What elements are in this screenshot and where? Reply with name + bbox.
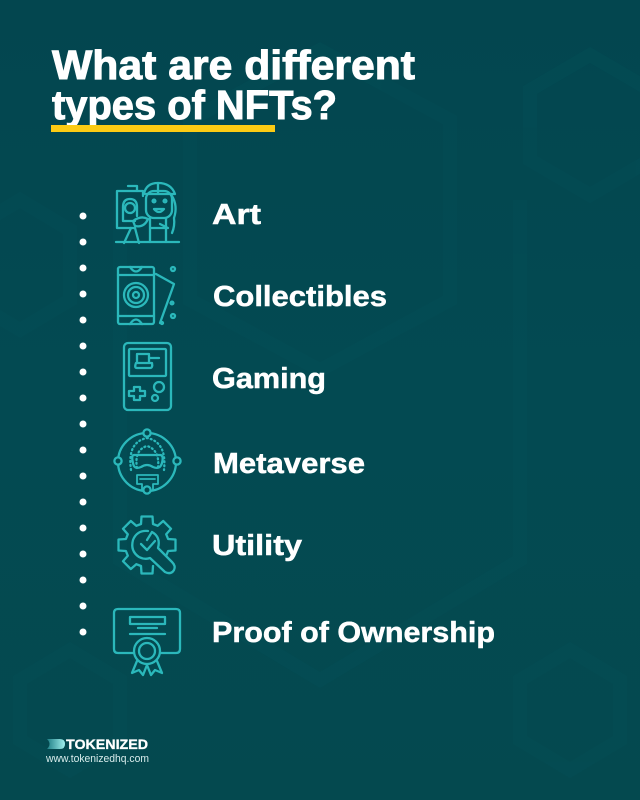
icon: certificate with rosette [114,609,180,675]
label: Utility: Utility [212,530,302,562]
icon: artist at easel [116,183,179,243]
title: What are different [52,42,415,88]
logo: TOKENIZED [66,737,148,752]
logo: www.tokenizedhq.com [45,753,149,765]
label: Collectibles: Collectibles [213,281,387,313]
icon: handheld game console [124,343,171,410]
label: Art: Art [212,199,261,231]
title: types of NFTs? [52,82,337,128]
icon: logo mark [47,739,65,749]
title underline [51,125,275,132]
label: Gaming: Gaming [212,363,326,395]
dotted timeline [80,212,86,636]
title [52,42,415,128]
icon: gear and wrench [118,516,176,574]
icon: metaverse headset globe [114,429,181,494]
label: Proof of Ownership: Proof of Ownership [212,617,495,649]
label: Metaverse: Metaverse [213,448,365,480]
icon: collectible cards [118,267,175,324]
logo [45,737,149,765]
